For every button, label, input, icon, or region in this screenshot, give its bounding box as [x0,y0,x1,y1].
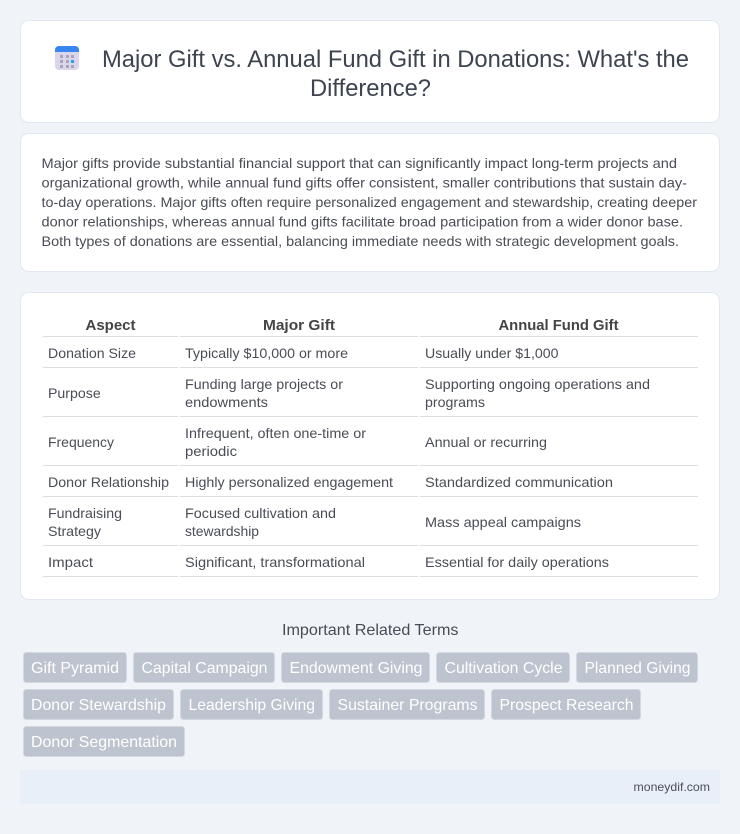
tag: leadership giving [180,690,322,720]
row: frequency: Annual or recurring [425,434,547,450]
tag: prospect research [492,690,640,720]
row: donation size [48,345,559,361]
tag: endowment giving [282,652,430,682]
text block: summary: Both types of donations are essential, balancing immediate needs with strategic development goals. [42,233,679,249]
row: impact: Impact [48,554,93,570]
row: purpose: programs [425,394,485,410]
tag: gift pyramid [24,652,126,682]
tag: capital campaign [134,652,274,682]
row: purpose: Supporting ongoing operations and [425,376,650,392]
tag: donor segmentation: Donor Segmentation [31,734,177,751]
panel: introduction text [20,134,720,272]
title [102,46,689,102]
row: donor relationship: Standardized communication [425,474,613,490]
tag group: related terms [24,652,698,756]
icon: calendar [55,46,79,70]
text block: summary: donor relationships, whereas annual fund gifts facilitate broad participation from a wider donor base. [42,214,683,230]
text block: summary [42,155,697,249]
panel: header [20,20,720,122]
table header: Major Gift [263,317,335,334]
text block: summary: organizational growth, while annual fund gifts offer consistent, smaller contributions that sustain day- [42,174,687,190]
title: Major Gift vs. Annual Fund Gift in Donations: What's the [102,46,689,73]
footer [20,770,720,804]
row: frequency [48,425,547,459]
row: fundraising strategy: Fundraising [48,505,122,521]
text block: summary: Major gifts provide substantial financial support that can significantly impact long-term projects and [42,155,677,171]
panel: comparison table [20,292,720,600]
row: fundraising strategy: stewardship [185,523,259,539]
tag: gift pyramid: Gift Pyramid [31,660,119,677]
row: donation size: Usually under $1,000 [425,345,559,361]
tag: cultivation cycle [436,652,570,682]
tag: prospect research: Prospect Research [500,697,634,714]
row: impact: Essential for daily operations [425,554,609,570]
tag: donor stewardship: Donor Stewardship [31,697,166,714]
row: frequency: Infrequent, often one-time or [185,425,366,441]
row: impact: Significant, transformational [185,554,365,570]
row: fundraising strategy: Strategy [48,523,101,539]
tag: sustainer programs: Sustainer Programs [338,697,478,714]
row: impact [48,554,609,570]
row: purpose [48,376,650,410]
tag: planned giving: Planned Giving [584,660,690,677]
row: donation size: Typically $10,000 or more [185,345,348,361]
row: donation size: Donation Size [48,345,136,361]
row: donor relationship: Donor Relationship [48,474,169,490]
text block: summary: to-day operations. Major gifts often require personalized engagement and stewardship, creating deeper [42,194,697,210]
tag: leadership giving: Leadership Giving [188,697,315,714]
title: Difference? [310,75,431,102]
tag: capital campaign: Capital Campaign [142,660,268,677]
row: frequency: periodic [185,443,237,459]
row: donor relationship [48,474,613,490]
tag: sustainer programs [330,690,484,720]
tag: endowment giving: Endowment Giving [290,660,422,677]
heading: related terms: Important Related Terms [282,622,458,639]
row: purpose: Funding large projects or [185,376,343,392]
tag: planned giving [576,652,698,682]
row: fundraising strategy [48,505,581,539]
footer source: moneydif.com [634,780,710,794]
row: donor relationship: Highly personalized engagement [185,474,393,490]
row: frequency: Frequency [48,434,114,450]
row: fundraising strategy: Focused cultivation and [185,505,336,521]
row: fundraising strategy: Mass appeal campaigns [425,514,581,530]
tag: donor segmentation [24,726,184,756]
table header [86,317,619,334]
row: purpose: Purpose [48,385,101,401]
table header: Annual Fund Gift [498,317,619,334]
tag: cultivation cycle: Cultivation Cycle [444,660,563,677]
row: purpose: endowments [185,394,268,410]
table header: Aspect [86,317,136,334]
tag: donor stewardship [24,690,174,720]
